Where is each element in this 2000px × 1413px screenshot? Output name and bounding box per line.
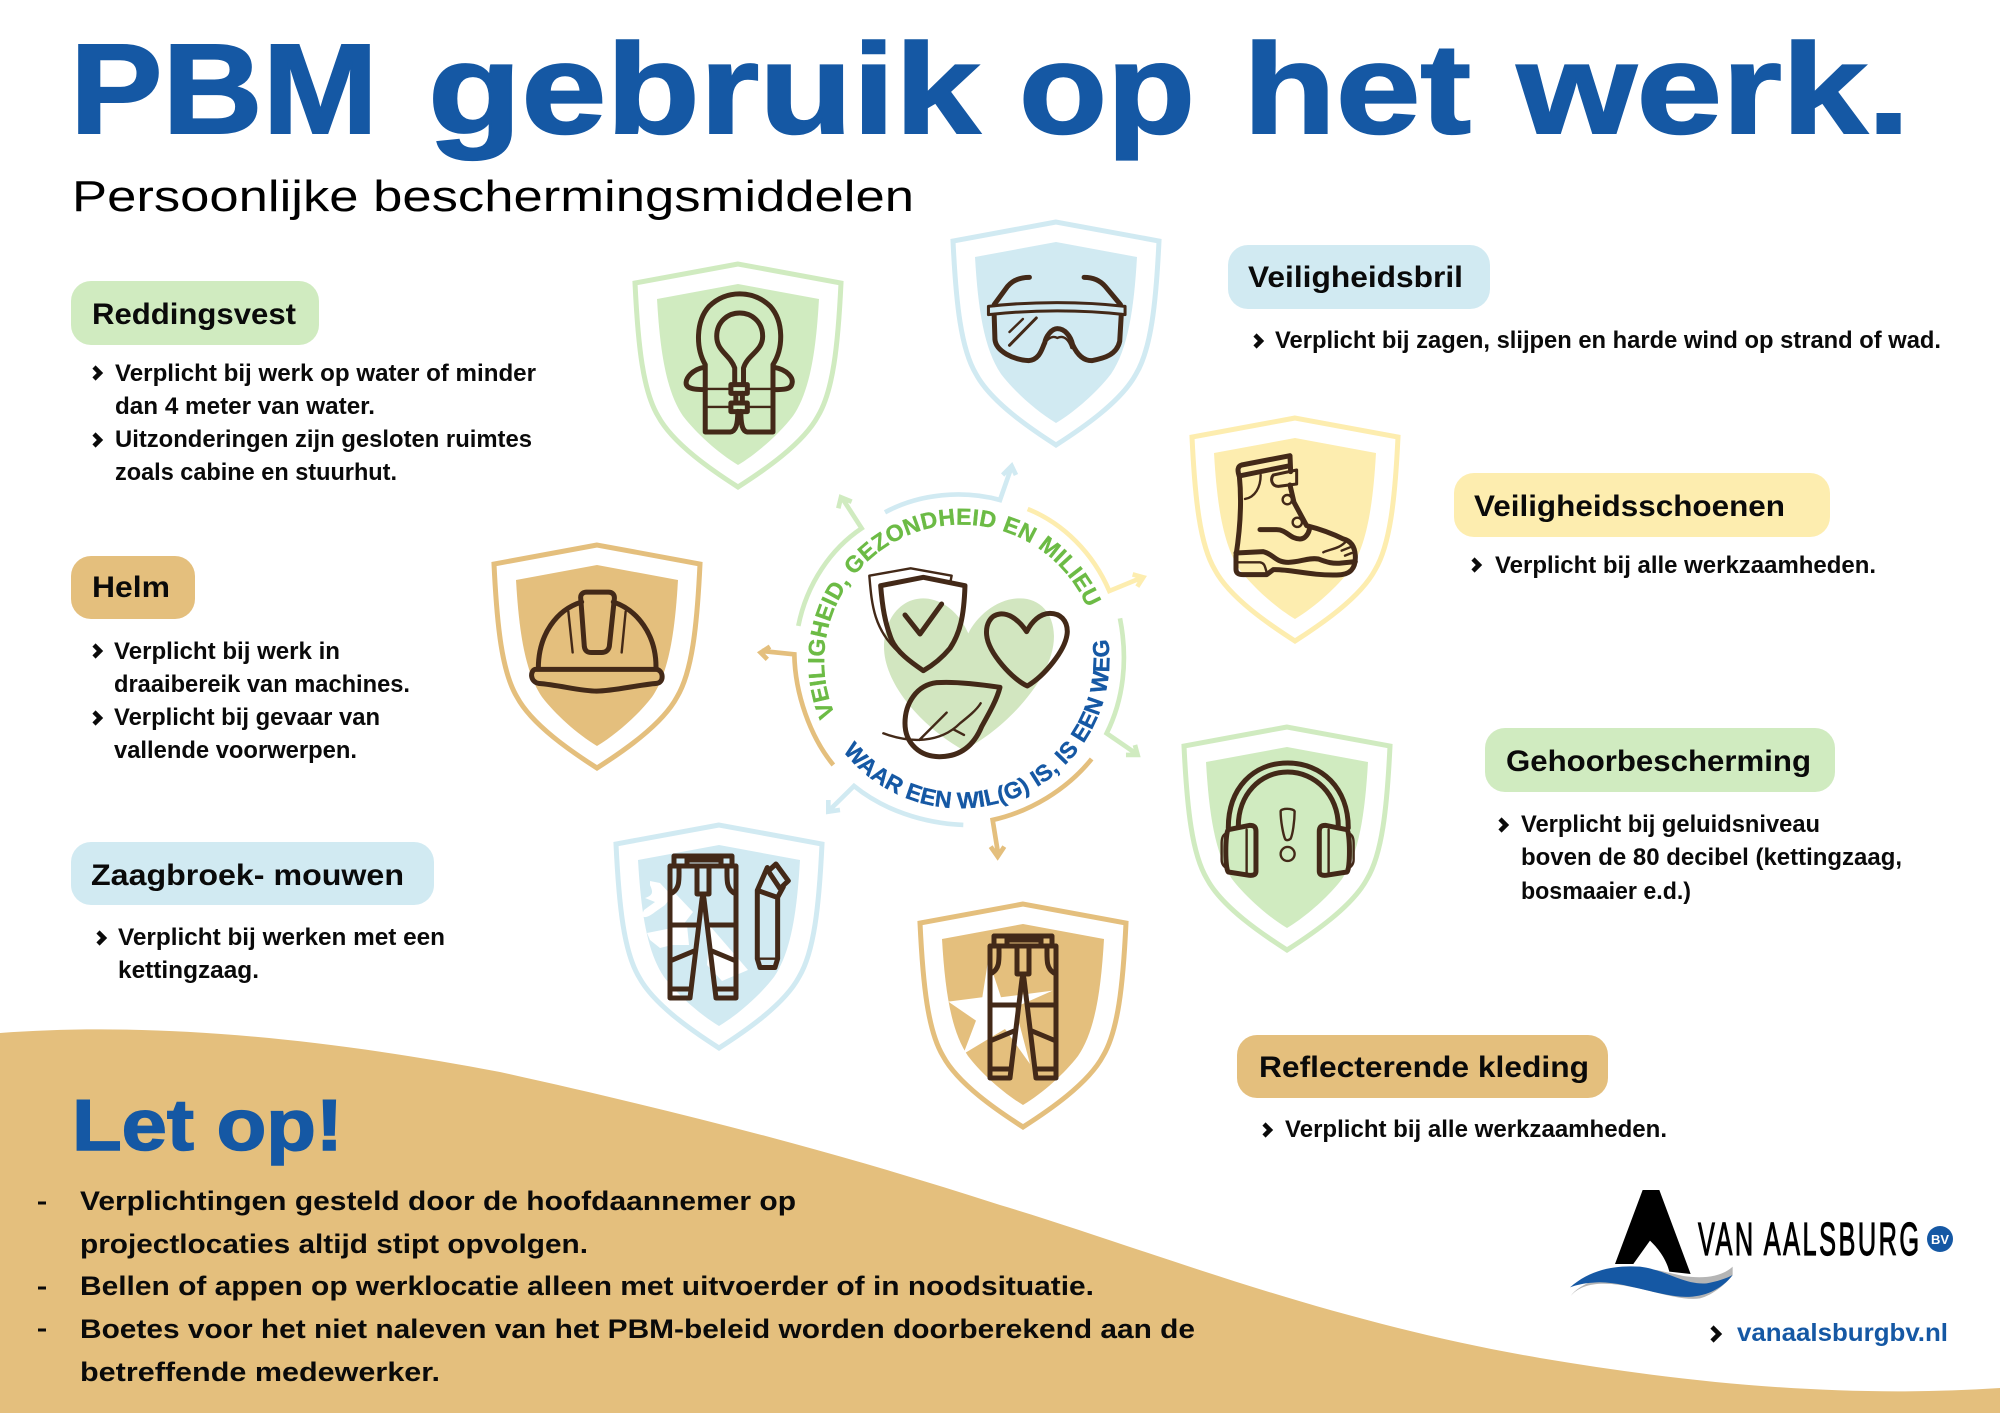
panel: Veiligheidsschoenen [1454,473,1876,579]
subtitle: Persoonlijke beschermingsmiddelen [72,172,914,221]
heading pill: Reflecterende kleding [1237,1035,1608,1098]
icon: safety goggles [988,277,1125,361]
icon: safety boots [1236,456,1355,575]
text block: Reflecterende kleding rule: Verplicht bij alle werkzaamheden. [1285,1116,1667,1143]
text block: Let op list: Verplichtingen gesteld door de hoofdaannemer op [80,1186,796,1216]
shield: ear protection [1184,727,1390,950]
icon: shield, heart and leaf [869,568,1067,757]
heading pill: Zaagbroek- mouwen: Zaagbroek- mouwen [91,859,404,892]
text block: Veiligheidsbril rule: Verplicht bij zagen, slijpen en harde wind op strand of wad. [1275,327,1941,354]
text block: Zaagbroek rules: Verplicht bij werken met een [118,924,445,951]
heading pill: Zaagbroek- mouwen [71,842,434,905]
panel: Gehoorbescherming [1485,728,1902,905]
website link: vanaalsburgbv.nl [1737,1319,1948,1347]
text block: Gehoorbescherming rule [1500,811,1902,905]
title: op [1019,18,1195,161]
text block: Helm rules: Verplicht bij werk in [114,638,340,665]
heading: Let op!: Let op! [72,1086,343,1166]
heading pill: Helm [71,556,195,619]
title [70,18,1910,161]
text block: Let op list: betreffende medewerker. [80,1357,440,1387]
curved text: WAAR EEN WIL(G) IS, IS EEN WEG: WAAR EEN WIL(G) IS, IS EEN WEG [845,640,1110,809]
title: gebruik [428,18,981,161]
text block: Zaagbroek rules: kettingzaag. [118,957,259,984]
shield: reflective trousers [920,904,1126,1127]
heading pill: Gehoorbescherming [1485,728,1835,792]
heading pill: Veiligheidsschoenen: Veiligheidsschoenen [1474,490,1785,523]
title: PBM [70,18,378,161]
panel: Veiligheidsbril [1228,245,1941,354]
icon: hard hat [532,592,662,691]
text block: Veiligheidsschoenen rule: Verplicht bij alle werkzaamheden. [1495,552,1876,579]
curved text: VEILIGHEID, GEZONDHEID EN MILIEU: VEILIGHEID, GEZONDHEID EN MILIEU [808,508,1102,721]
background wave [0,1029,2000,1413]
text block: Reddingsvest rules: Verplicht bij werk op water of minder [115,360,536,387]
centre emblem [757,462,1147,861]
heading pill: Veiligheidsschoenen [1454,473,1830,537]
heading pill: Reddingsvest [71,281,319,345]
icon: ear protection [1222,763,1354,875]
heading pill: Helm: Helm [92,571,170,604]
text block: Gehoorbescherming rule: bosmaaier e.d.) [1521,878,1691,905]
text block: Let op list: projectlocaties altijd stipt opvolgen. [80,1229,588,1259]
text block: Zaagbroek rules [98,924,445,984]
text block: Reddingsvest rules [94,360,536,486]
logo name: VAN AALSBURG [1698,1213,1919,1265]
title: werk. [1516,18,1910,161]
text block: Reddingsvest rules: zoals cabine en stuurhut. [115,459,397,486]
panel: Let op [38,1086,1195,1387]
panel: Helm [71,556,410,764]
title: het [1243,18,1471,161]
icon: life vest [686,294,792,432]
heading pill: Veiligheidsbril: Veiligheidsbril [1248,261,1463,294]
panel: Zaagbroek- mouwen [71,842,445,984]
heading pill: Reddingsvest: Reddingsvest [92,298,296,331]
shield: hard hat [494,545,700,768]
shield: safety goggles [953,222,1159,445]
text block: Helm rules: Verplicht bij gevaar van [114,704,380,731]
text block: Let op list: Boetes voor het niet naleven van het PBM-beleid worden doorberekend aan de [80,1314,1195,1344]
circular arrows [761,466,1143,857]
logo badge BV [1927,1226,1953,1252]
shield: safety boots [1192,418,1398,641]
text block: Reddingsvest rules: Uitzonderingen zijn gesloten ruimtes [115,426,532,453]
heading pill: Veiligheidsbril [1228,245,1490,309]
logo mark [1570,1190,1733,1299]
logo badge BV: BV [1931,1232,1949,1247]
text block: Helm rules: vallende voorwerpen. [114,737,357,764]
heading pill: Gehoorbescherming: Gehoorbescherming [1506,745,1811,778]
heading pill: Reflecterende kleding: Reflecterende kleding [1259,1051,1589,1084]
text block: Let op list [38,1186,1195,1387]
panel: Reflecterende kleding [1237,1035,1667,1143]
icon: trousers [670,856,736,998]
text block: Reddingsvest rules: dan 4 meter van water. [115,393,375,420]
text block: Helm rules [94,638,410,764]
shield: chainsaw trousers and sleeve [616,825,822,1048]
panel: Reddingsvest [71,281,536,486]
text block: Let op list: Bellen of appen op werklocatie alleen met uitvoerder of in noodsituatie. [80,1271,1094,1301]
text block: Gehoorbescherming rule: boven de 80 decibel (kettingzaag, [1521,844,1902,871]
shield: life vest [635,264,841,487]
icon: chainsaw sleeve [757,864,788,968]
icon: trousers [990,936,1056,1078]
text block: Gehoorbescherming rule: Verplicht bij geluidsniveau [1521,811,1820,838]
logo: Van Aalsburg BV [1570,1190,1953,1299]
text block: Helm rules: draaibereik van machines. [114,671,410,698]
icon: heart background [884,598,1054,750]
